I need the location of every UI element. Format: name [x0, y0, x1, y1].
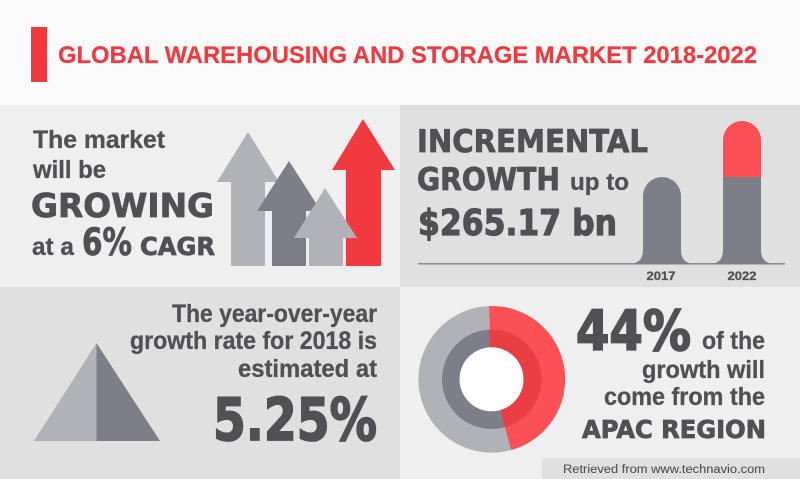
text: 44% from APAC region — [576, 299, 766, 444]
text: 44% from APAC region: 44% — [576, 299, 691, 363]
panel: market growth CAGR — [0, 105, 400, 287]
text: market growing at 6% CAGR: will be — [32, 156, 106, 184]
text: year-over-year growth rate — [130, 300, 378, 454]
title accent bar — [31, 27, 47, 82]
dark arrow — [257, 161, 321, 266]
text: market growing at 6% CAGR: The market — [33, 126, 166, 154]
short gray arrow — [294, 188, 357, 266]
text: 44% from APAC region: APAC REGION — [582, 415, 766, 444]
title block — [31, 27, 757, 82]
title: GLOBAL WAREHOUSING AND STORAGE MARKET 2018-2022 — [58, 42, 757, 69]
text: market growing at 6% CAGR: GROWING — [31, 186, 214, 225]
bar 2022 base — [712, 177, 772, 264]
text: market growing at 6% CAGR — [31, 126, 215, 264]
panel: incremental growth — [400, 105, 800, 287]
icon: pyramid — [34, 343, 160, 441]
text: market growing at 6% CAGR: CAGR — [140, 232, 215, 261]
panel: APAC share — [400, 287, 800, 479]
text: incremental growth up to $265.17 bn: GROWTH — [417, 162, 560, 198]
donut chart — [418, 306, 565, 453]
text: incremental growth up to $265.17 bn: up to — [570, 169, 629, 196]
source note: Retrieved from www.technavio.com — [563, 464, 765, 476]
panel: year-over-year growth — [0, 287, 400, 479]
text: incremental growth up to $265.17 bn: INCREMENTAL — [417, 124, 648, 160]
bar chart: 2017 vs 2022 — [418, 121, 785, 283]
text: year-over-year growth rate: 5.25% — [213, 385, 377, 454]
text: 44% from APAC region: of the — [702, 327, 765, 355]
bar 2022 increment — [723, 121, 761, 177]
red arrow — [332, 119, 395, 266]
text: 44% from APAC region: growth will — [642, 356, 765, 384]
label 2017: 2017 — [646, 269, 676, 283]
text: 44% from APAC region: come from the — [604, 383, 765, 411]
text: incremental growth up to $265.17 bn: $265.17 bn — [418, 203, 617, 244]
text: year-over-year growth rate: The year-over-year — [172, 300, 377, 328]
label 2022: 2022 — [728, 269, 757, 283]
text: incremental growth up to $265.17 bn — [417, 124, 648, 244]
source note — [542, 458, 800, 479]
bar 2017 — [632, 177, 692, 264]
text: market growing at 6% CAGR: 6% — [82, 221, 132, 264]
text: year-over-year growth rate: growth rate for 2018 is — [130, 327, 377, 355]
axis line — [418, 263, 785, 265]
icon: growth arrows — [217, 119, 395, 266]
text: market growing at 6% CAGR: at a — [32, 233, 75, 261]
text: year-over-year growth rate: estimated at — [238, 355, 378, 383]
tall gray arrow — [217, 132, 279, 266]
